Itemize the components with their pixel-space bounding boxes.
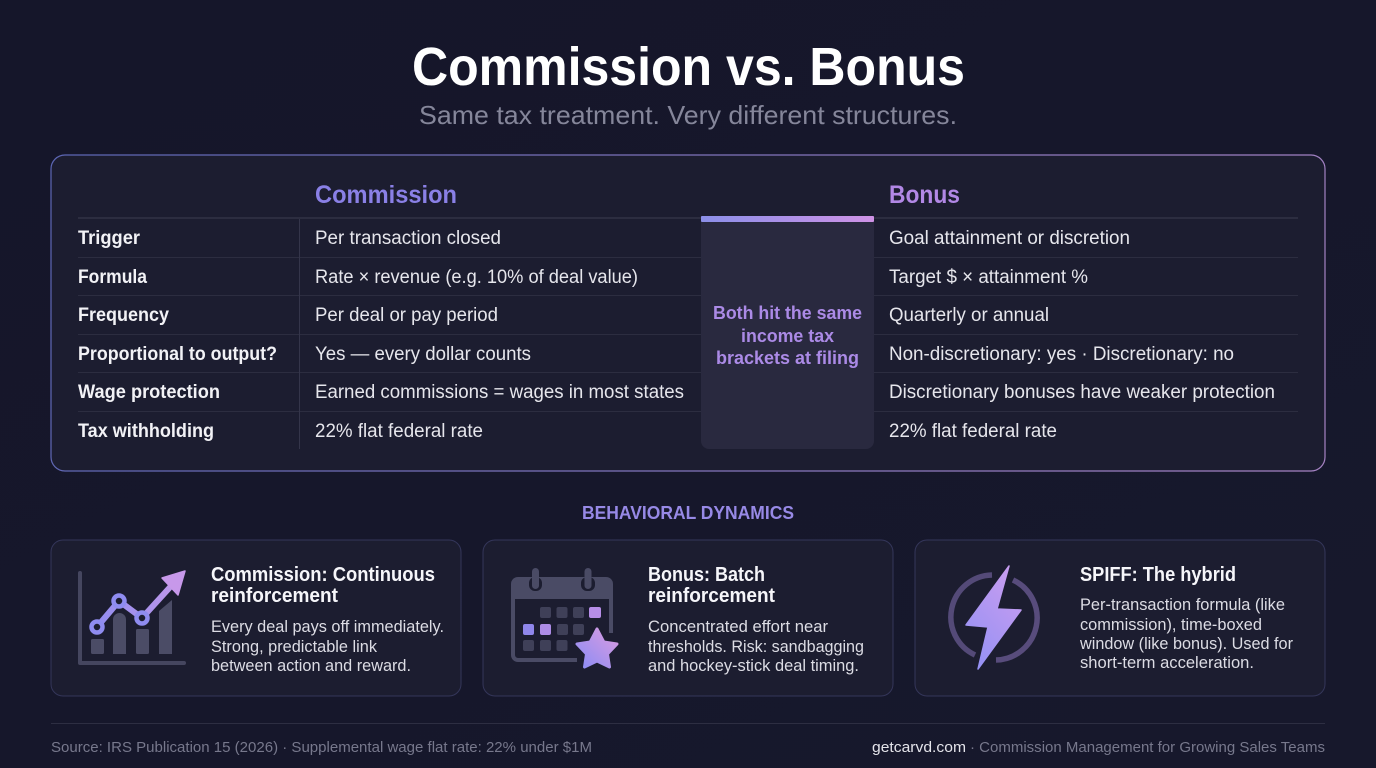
column heading: Commission: Commission: [315, 181, 457, 209]
row: Formula: Rate × revenue (e.g. 10% of deal value): [315, 267, 638, 288]
row: Tax withholding: 22% flat federal rate: [315, 421, 483, 442]
card body: commission), time-boxed: [1080, 616, 1262, 634]
panel: commission card: [51, 540, 461, 696]
row: Tax withholding: [78, 421, 1057, 442]
row: Frequency: Quarterly or annual: [889, 305, 1049, 326]
row: Trigger: Goal attainment or discretion: [889, 228, 1130, 249]
row: Wage protection: Earned commissions = wages in most states: [315, 382, 684, 403]
row: Frequency: Frequency: [78, 305, 169, 326]
card body: window (like bonus). Used for: [1079, 635, 1293, 653]
title: Commission vs. Bonus: [412, 37, 965, 97]
row: Frequency: [78, 305, 1049, 326]
card body: [211, 618, 444, 675]
card heading: SPIFF: The hybrid: [1080, 563, 1236, 586]
panel: SPIFF card: [915, 540, 1325, 696]
row: Formula: Target $ × attainment %: [889, 267, 1088, 288]
subtitle: Same tax treatment. Very different structures.: [419, 100, 957, 130]
card body: [648, 618, 864, 675]
card heading: Commission: Continuous: [211, 563, 435, 586]
row: Trigger: Per transaction closed: [315, 228, 501, 249]
row: Proportional to output?: Yes — every dollar counts: [315, 344, 531, 365]
row: Trigger: Trigger: [78, 228, 141, 249]
card body: thresholds. Risk: sandbagging: [648, 638, 864, 656]
panel: bonus card: [483, 540, 893, 696]
card body: between action and reward.: [211, 657, 411, 675]
row: Tax withholding: 22% flat federal rate: [889, 421, 1057, 442]
footer: brand: · Commission Management for Growing Sales Teams: [970, 739, 1325, 756]
footer: source: Source: IRS Publication 15 (2026) · Supplemental wage flat rate: 22% under $1M: [51, 739, 592, 756]
callout: shared tax brackets: brackets at filing: [716, 348, 859, 368]
row: Proportional to output?: Non-discretionary: yes · Discretionary: no: [889, 344, 1234, 365]
callout: shared tax brackets: Both hit the same: [713, 303, 862, 323]
card heading: Bonus: Batch: [648, 563, 765, 586]
card body: Concentrated effort near: [648, 618, 829, 636]
card heading: reinforcement: [648, 584, 775, 607]
row: Wage protection: Discretionary bonuses have weaker protection: [889, 382, 1275, 403]
icon: calendar with star: [511, 568, 617, 667]
card heading: reinforcement: [211, 584, 338, 607]
row: Proportional to output?: Proportional to output?: [78, 344, 277, 365]
row: Formula: Formula: [78, 267, 147, 288]
card body: and hockey-stick deal timing.: [648, 657, 859, 675]
card heading: [648, 563, 775, 607]
row: Tax withholding: Tax withholding: [78, 421, 214, 442]
row: Formula: [78, 267, 1088, 288]
callout: shared tax brackets: income tax: [741, 326, 834, 346]
icon: lightning bolt: [951, 566, 1037, 669]
section heading: behavioral dynamics: BEHAVIORAL DYNAMICS: [582, 503, 794, 523]
row: Frequency: Per deal or pay period: [315, 305, 498, 326]
footer: brand: getcarvd.com: [872, 739, 966, 756]
card heading: [211, 563, 435, 607]
row: Proportional to output?: [78, 344, 1234, 365]
icon: growth chart: [80, 571, 185, 663]
card body: Strong, predictable link: [211, 638, 378, 656]
row: Trigger: [78, 228, 1130, 249]
column heading: Bonus: Bonus: [889, 181, 960, 209]
panel: comparison table: [51, 155, 1325, 471]
card body: Per-transaction formula (like: [1080, 596, 1285, 614]
card body: short-term acceleration.: [1080, 654, 1254, 672]
card body: Every deal pays off immediately.: [211, 618, 444, 636]
row: Wage protection: Wage protection: [78, 382, 220, 403]
callout: shared tax brackets: [701, 216, 874, 449]
row: Wage protection: [78, 382, 1275, 403]
card body: [1079, 596, 1293, 672]
